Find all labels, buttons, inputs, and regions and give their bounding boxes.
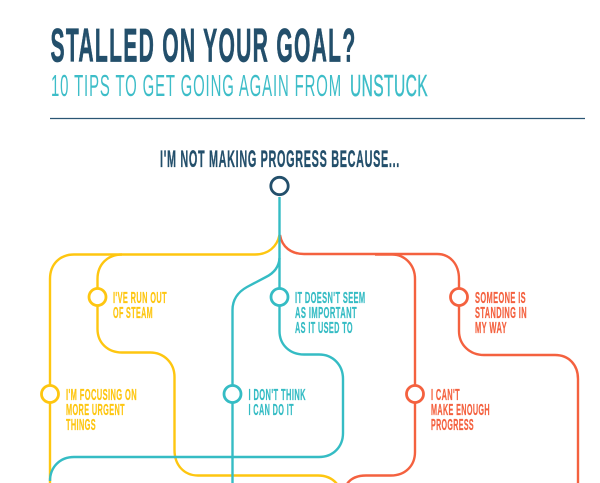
node: doesn't seem as important [271,288,366,337]
red route lines [280,235,578,483]
node: can't make enough progress [406,386,490,434]
text: STANDING IN [475,305,527,322]
node: focusing on more urgent things [42,386,137,434]
node: focusing on more urgent things: THINGS [66,417,96,434]
start node [271,177,288,195]
node: run out of steam: OF STEAM [113,305,153,322]
text: I'VE RUN OUT [113,290,167,307]
yellow route lines [50,235,337,483]
text: SOMEONE IS [475,290,526,307]
text: IT DOESN'T SEEM [295,290,366,307]
teal route lines [50,197,343,483]
node: don't think I can do it [224,386,306,419]
node: doesn't seem as important: AS IMPORTANT [295,305,357,322]
node: doesn't seem as important: AS IT USED TO [295,320,353,337]
text: I'M FOCUSING ON [66,387,137,404]
node: can't make enough progress: I CAN'T [431,387,460,404]
subtitle brand name: UNSTUCK [350,69,428,103]
node: don't think I can do it: I CAN DO IT [248,402,294,419]
node: focusing on more urgent things: MORE URGENT [66,402,125,419]
text: MAKE ENOUGH [431,402,490,419]
node: someone is standing in my way [450,288,527,337]
text: I DON'T THINK [248,387,306,404]
node: can't make enough progress: PROGRESS [431,417,474,434]
node: someone is standing in my way: MY WAY [475,320,507,337]
node: run out of steam [89,288,167,322]
